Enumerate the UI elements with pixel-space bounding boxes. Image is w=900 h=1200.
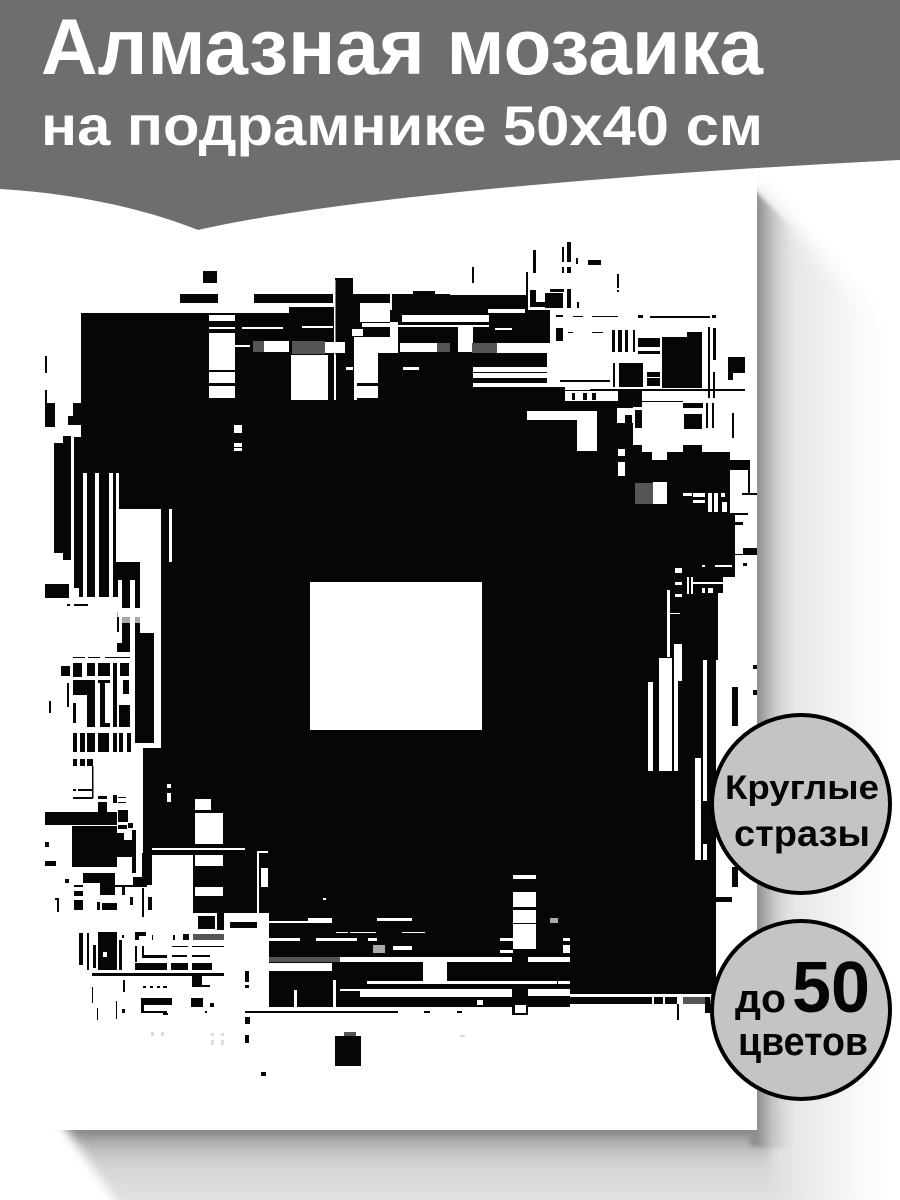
badge: up to 50 colours: 50 bbox=[792, 948, 870, 1028]
badge: round rhinestones: Круглые bbox=[725, 769, 879, 807]
canvas drop shadow bbox=[57, 186, 895, 1200]
badge: up to 50 colours: до bbox=[735, 977, 786, 1021]
canvas with abstract mosaic artwork bbox=[45, 150, 757, 1130]
badge: up to 50 colours bbox=[712, 921, 890, 1099]
central white square bbox=[310, 582, 482, 730]
grey header banner bbox=[0, 0, 900, 230]
title: Алмазная мозаика bbox=[41, 2, 764, 91]
badge: round rhinestones: стразы bbox=[734, 813, 870, 854]
badge: round rhinestones bbox=[712, 715, 890, 893]
badge: up to 50 colours: цветов bbox=[738, 1020, 868, 1064]
subtitle: на подрамнике 50х40 см bbox=[41, 94, 763, 157]
